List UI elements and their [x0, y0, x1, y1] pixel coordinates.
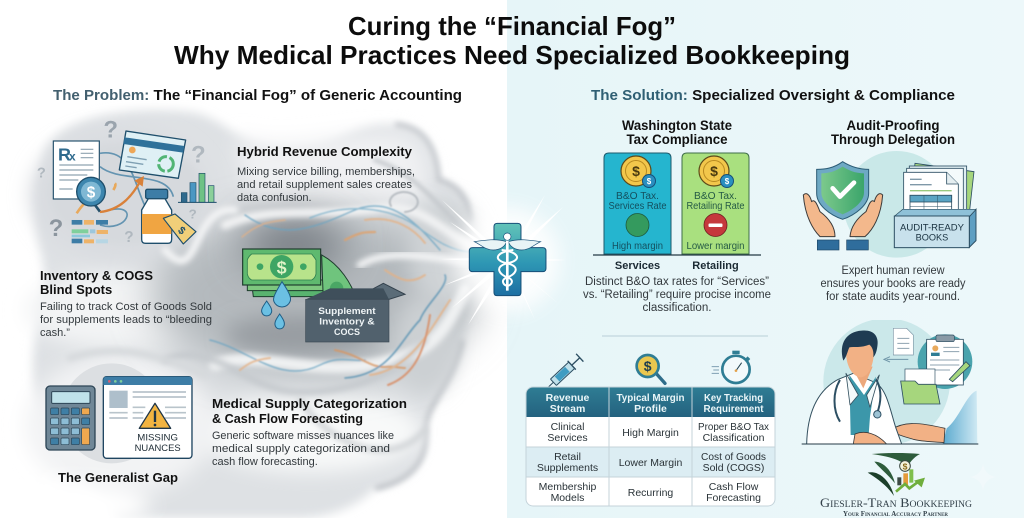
table body: Models — [551, 492, 584, 504]
audit-ready box: BOOKS — [916, 233, 948, 243]
card labels: Services — [615, 260, 660, 272]
table header: Key Tracking — [704, 392, 763, 404]
table body: Lower Margin — [619, 457, 682, 469]
table body: Clinical — [551, 421, 584, 433]
clipboard — [927, 335, 970, 385]
price tag — [163, 214, 196, 244]
text block: hybrid revenue complexity: Mixing service billing, memberships, — [237, 166, 415, 178]
table body: Sold (COGS) — [703, 462, 764, 474]
card: retailing: B&O Tax. — [694, 191, 737, 202]
magnifier with dollar — [77, 177, 105, 212]
heading: washington state: Tax Compliance — [626, 132, 728, 147]
text block: medical supply categorization: cash flow forecasting. — [212, 456, 318, 468]
table header: Requirement — [704, 403, 764, 415]
bar chart — [178, 173, 217, 202]
text block: inventory and COGS — [40, 268, 212, 339]
supplement bottle — [142, 189, 172, 243]
supplement inventory box — [306, 283, 405, 342]
banknote — [243, 249, 321, 285]
heading: audit-proofing: Audit-Proofing — [846, 118, 940, 133]
magnifier with dollar: $ — [87, 184, 96, 201]
table body: Membership — [539, 481, 597, 493]
water drops — [262, 282, 291, 329]
table header: Profile — [634, 403, 667, 415]
table body: Retail — [554, 451, 581, 463]
logo mark — [868, 453, 925, 496]
question marks — [37, 116, 206, 246]
table header: Stream — [550, 403, 585, 415]
icon: calculator and missing nuances window — [46, 363, 192, 463]
table body: Cost of Goods — [701, 451, 766, 463]
table header: Typical Margin — [616, 392, 684, 404]
card: services: High margin — [612, 241, 663, 252]
table body: Proper B&O Tax — [698, 421, 770, 433]
back bills — [247, 255, 357, 300]
text block: hybrid revenue complexity: and retail supplement sales creates — [237, 179, 412, 191]
table header: Revenue — [546, 392, 590, 404]
table header — [546, 392, 764, 415]
question marks: ? — [103, 116, 118, 143]
question marks: ? — [189, 206, 197, 221]
table body: Recurring — [628, 487, 673, 499]
logo: Giesler-Tran Bookkeeping — [820, 453, 973, 518]
logo mark: $ — [903, 461, 908, 471]
orange arrow — [100, 182, 140, 212]
tagline: Your Financial Accuracy Partner — [843, 510, 948, 518]
icon: stopwatch — [712, 351, 750, 383]
card: services — [604, 153, 671, 254]
card: services: $ — [632, 163, 640, 179]
card: services: $ — [647, 177, 652, 186]
text block: medical supply categorization: Medical Supply Categorization — [212, 396, 407, 411]
text block: inventory and COGS: Inventory & COGS — [40, 268, 153, 283]
card: retailing: $ — [725, 177, 730, 186]
question marks: ? — [37, 165, 46, 181]
icon: magnifier with dollar — [637, 355, 665, 383]
software window: NUANCES — [135, 443, 181, 453]
sparkle — [970, 464, 996, 490]
text block: medical supply categorization: & Cash Flow Forecasting — [212, 411, 363, 426]
supplement inventory box: COCS — [334, 327, 360, 337]
supplement inventory box: Supplement — [318, 306, 376, 316]
table body: Services — [547, 432, 588, 444]
table body: Forecasting — [706, 492, 761, 504]
body text: ensures your books are ready — [820, 278, 966, 290]
card: services: B&O Tax. — [616, 191, 659, 202]
text block: medical supply categorization: medical supply categorization and — [212, 443, 390, 455]
table body: Supplements — [537, 462, 598, 474]
prescription document — [53, 141, 99, 199]
audit-ready box — [894, 209, 976, 248]
table body: Cash Flow — [709, 481, 759, 493]
software window — [103, 377, 192, 458]
banknote: $ — [277, 257, 287, 277]
icon: money, drops and inventory box — [243, 223, 546, 342]
calculator — [46, 386, 95, 450]
panel: washington state tax compliance — [583, 118, 771, 314]
text block: medical supply categorization: Generic software misses nuances like — [212, 430, 394, 442]
text block: inventory and COGS: Failing to track Cost of Goods Sold — [40, 301, 212, 313]
patient arm — [890, 391, 977, 444]
audit-ready box: AUDIT-READY — [900, 222, 964, 232]
illustration: doctor with patient — [802, 318, 978, 445]
table icons — [544, 351, 750, 391]
label: the generalist gap: The Generalist Gap — [58, 470, 178, 485]
text block: medical supply categorization — [212, 396, 407, 468]
heading: the solution: The Solution: Specialized Oversight & Compliance — [591, 87, 955, 104]
illustration: shield, hands, audit-ready books — [803, 151, 976, 258]
body text — [820, 265, 966, 303]
icon cluster: hybrid revenue — [37, 116, 217, 246]
title: Why Medical Practices Need Specialized Bookkeeping — [174, 40, 850, 70]
fog cloud background — [0, 110, 492, 518]
table body — [537, 421, 770, 504]
supplement inventory box: Inventory & — [319, 317, 375, 327]
body text: vs. “Retailing” require procise income — [583, 289, 771, 301]
prescription document: Rx — [58, 145, 76, 165]
text block: hybrid revenue complexity: Hybrid Revenue Complexity — [237, 144, 413, 159]
heading: washington state — [622, 118, 732, 147]
table body: Classification — [703, 432, 765, 444]
question marks: ? — [191, 142, 206, 169]
price tag: $ — [175, 224, 188, 237]
heading: audit-proofing: Through Delegation — [831, 132, 955, 147]
body text: for state audits year-round. — [826, 291, 960, 303]
body text: Expert human review — [842, 265, 945, 277]
heading: the problem: The Problem: The “Financial Fog” of Generic Accounting — [53, 87, 462, 104]
document and arrow — [884, 328, 913, 362]
body text: classification. — [642, 302, 712, 314]
body text: Distinct B&O tax rates for “Services” — [585, 276, 769, 288]
text block: inventory and COGS: for supplements leads to “bleeding — [40, 314, 212, 326]
card: services: Services Rate — [608, 201, 667, 212]
medical cross with caduceus — [469, 223, 546, 296]
card labels — [615, 260, 739, 272]
card: retailing: Lower margin — [686, 241, 744, 252]
text block: inventory and COGS: Blind Spots — [40, 282, 112, 297]
light burst — [440, 195, 566, 325]
heading: washington state: Washington State — [622, 118, 732, 133]
question marks: ? — [49, 215, 63, 242]
software window: MISSING — [137, 433, 178, 443]
text block: inventory and COGS: cash.” — [40, 327, 70, 339]
card: retailing: Retailing Rate — [686, 201, 745, 212]
shield — [817, 162, 869, 219]
credit card — [119, 131, 186, 178]
background: solution panel — [507, 0, 1024, 518]
card: retailing — [682, 153, 749, 254]
text block: hybrid revenue complexity: data confusion. — [237, 192, 312, 204]
panel: audit-proofing — [803, 118, 976, 303]
card: retailing: $ — [710, 163, 718, 179]
table body: High Margin — [622, 427, 679, 439]
folder — [901, 369, 940, 404]
card labels: Retailing — [692, 260, 739, 272]
fog swirls — [70, 160, 470, 450]
document stack — [904, 163, 974, 218]
data rows — [72, 220, 108, 243]
heading: audit-proofing — [831, 118, 955, 147]
title: Curing the “Financial Fog” — [348, 11, 676, 41]
text block: hybrid revenue complexity — [237, 144, 415, 204]
body text — [583, 276, 771, 314]
icon: magnifier with dollar: $ — [644, 358, 652, 374]
title — [174, 11, 850, 70]
fog streaks: blue and orange — [210, 206, 470, 385]
table: revenue streams — [526, 387, 775, 506]
wordmark: Giesler-Tran Bookkeeping — [820, 495, 973, 510]
question marks: ? — [124, 229, 134, 246]
icon: syringe — [544, 353, 584, 391]
caring hands — [803, 194, 883, 237]
doctor — [807, 330, 902, 444]
